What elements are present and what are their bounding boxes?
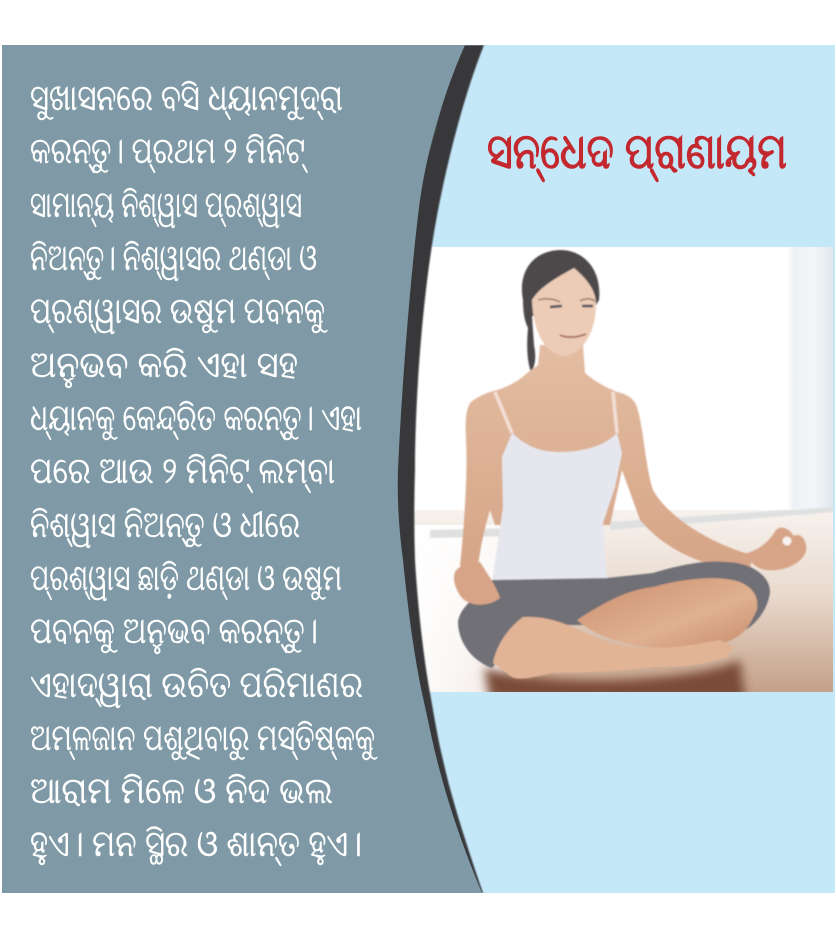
body skin (460, 345, 752, 572)
text block: instructions (30, 77, 377, 866)
text block: instructions: ଧ୍ୟାନକୁ କେନ୍ଦ୍ରିତ କରନ୍ତୁ। ଏହା (30, 397, 362, 441)
text block: instructions: ଏହାଦ୍ୱାରା ଉଚିତ ପରିମାଣର (30, 664, 363, 708)
text block: instructions: ପ୍ରଶ୍ୱାସ ଛାଡ଼ି ଥଣ୍ଡା ଓ ଉଷୁମ (30, 557, 342, 601)
photo: woman meditating (405, 247, 834, 700)
upper leg (577, 578, 757, 648)
text block: instructions: ପବନକୁ ଅନୁଭବ କରନ୍ତୁ। (30, 610, 318, 654)
pants (458, 562, 770, 668)
lower leg (493, 617, 733, 679)
text block: instructions: ପ୍ରଶ୍ୱାସର ଉଷୁମ ପବନକୁ (30, 290, 328, 334)
text block: instructions: ସୁଖାସନରେ ବସି ଧ୍ୟାନମୁଦ୍ରା (30, 77, 343, 121)
right hand (747, 528, 806, 570)
hair (522, 250, 599, 372)
left hand (454, 562, 500, 605)
top (492, 433, 622, 582)
panel: light blue background (400, 45, 835, 893)
text block: instructions: ନିଅନ୍ତୁ। ନିଶ୍ୱାସର ଥଣ୍ଡା ଓ (30, 237, 317, 281)
text block: instructions: ଆରାମ ମିଳେ ଓ ନିଦ ଭଲ (30, 770, 333, 811)
text block: instructions: ସାମାନ୍ୟ ନିଶ୍ୱାସ ପ୍ରଶ୍ୱାସ (30, 184, 302, 228)
text block: instructions: ପରେ ଆଉ ୨ ମିନିଟ୍ ଲମ୍ବା (30, 450, 335, 493)
text block: instructions: ନିଶ୍ୱାସ ନିଅନ୍ତୁ ଓ ଧୀରେ (30, 504, 300, 548)
face (532, 268, 596, 356)
text block: instructions: ଅନୁଭବ କରି ଏହା ସହ (30, 344, 298, 388)
text block: instructions: ଅମ୍ଳଜାନ ପଶୁଥିବାରୁ ମସ୍ତିଷ୍କକୁ (30, 717, 377, 761)
text block: instructions: କରନ୍ତୁ। ପ୍ରଥମ ୨ ମିନିଟ୍ (30, 130, 308, 174)
text block: instructions: ହୁଏ। ମନ ସ୍ଥିର ଓ ଶାନ୍ତ ହୁଏ। (30, 823, 362, 866)
panel: grey text panel (2, 45, 482, 893)
curved dark band (390, 45, 484, 893)
